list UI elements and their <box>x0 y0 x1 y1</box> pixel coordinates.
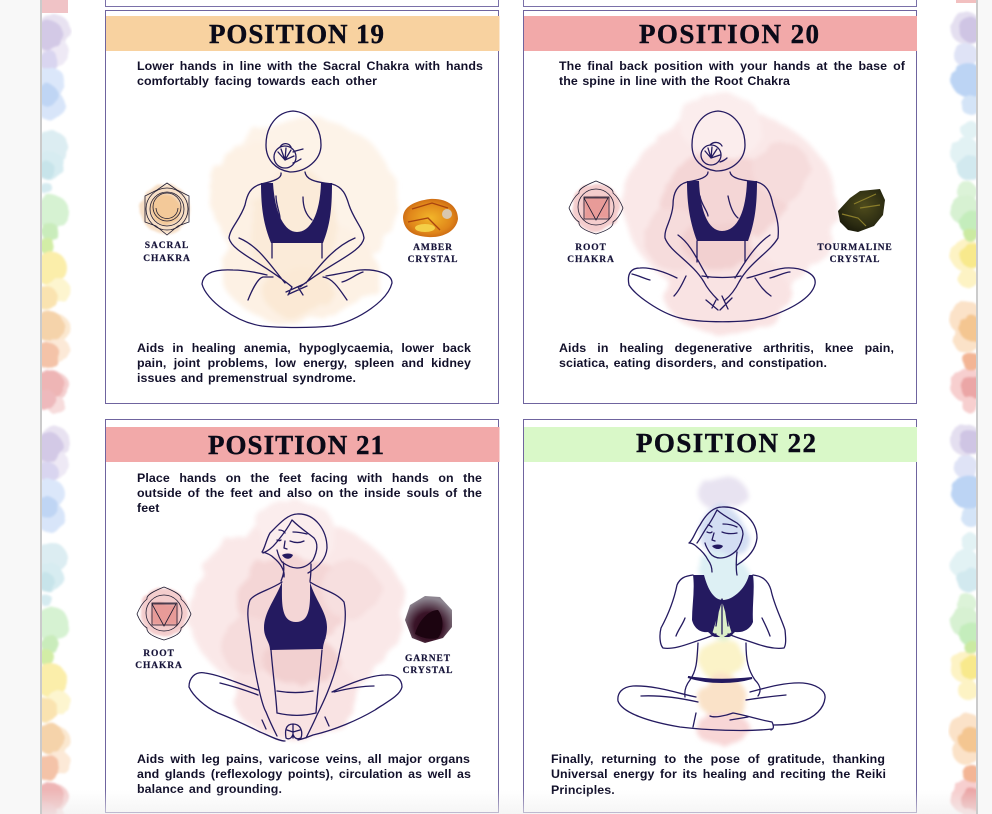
label: tourmaline crystal: TOURMALINE <box>817 243 893 253</box>
label: root chakra: ROOT <box>575 243 607 253</box>
heading band: position 22: POSITION 22 <box>636 428 816 458</box>
label: tourmaline crystal <box>817 243 893 265</box>
heading band: position 22 <box>524 427 917 462</box>
text: position 20 benefits <box>559 341 894 370</box>
text: position 20 instructions: The final back position with your hands at the base of <box>559 59 905 73</box>
label: root chakra: CHAKRA <box>567 255 615 265</box>
text: position 22 closing: Principles. <box>551 783 615 797</box>
text: position 19 instructions: comfortably facing towards each other <box>137 74 377 88</box>
watercolor aura <box>624 93 836 334</box>
previous panel bottom edge, left <box>105 0 499 7</box>
icon: garnet crystal <box>405 596 452 643</box>
text: position 21 benefits: and glands (reflexology points), circulation as well as <box>137 767 471 781</box>
left page margin <box>0 0 42 814</box>
heading band: position 21: POSITION 21 <box>208 430 384 460</box>
label: sacral chakra: SACRAL <box>145 241 189 251</box>
label: tourmaline crystal: CRYSTAL <box>830 255 880 265</box>
label: root chakra: CHAKRA <box>135 661 183 671</box>
panel: position 20 <box>523 10 917 404</box>
label: amber crystal: AMBER <box>413 243 453 253</box>
figure: seated front view, prayer pose <box>618 507 825 730</box>
figure: seated front view <box>189 514 402 741</box>
text: position 21 instructions: feet <box>137 501 159 515</box>
bottom page fade <box>42 790 976 814</box>
text: position 21 instructions: Place hands on the feet facing with hands on the <box>137 471 482 485</box>
text: position 20 benefits: Aids in healing degenerative arthritis, knee pain, <box>559 341 894 355</box>
label: amber crystal <box>408 243 458 265</box>
figure: seated back view <box>202 111 392 328</box>
previous panel bottom edge, right <box>523 0 917 7</box>
right page margin <box>976 0 992 814</box>
heading band: position 19: POSITION 19 <box>209 19 384 49</box>
heading band: position 19 <box>106 16 500 51</box>
panel: position 21 <box>105 419 499 813</box>
text: position 20 instructions: the spine in line with the Root Chakra <box>559 74 790 88</box>
label: garnet crystal <box>403 654 453 676</box>
text: position 21 instructions: outside of the feet and also on the inside souls of the <box>137 486 482 500</box>
label: sacral chakra: CHAKRA <box>143 254 191 264</box>
text: position 22 closing: Finally, returning to the pose of gratitude, thanking <box>551 752 885 766</box>
label: garnet crystal: CRYSTAL <box>403 666 453 676</box>
rainbow chakra aura <box>696 475 748 746</box>
panel: position 19 <box>105 10 499 404</box>
text: position 20 instructions <box>559 59 905 88</box>
text: position 21 benefits: Aids with leg pains, varicose veins, all major organs <box>137 752 470 766</box>
text: position 21 benefits: balance and grounding. <box>137 782 282 796</box>
text: position 19 benefits: issues and premenstrual syndrome. <box>137 371 356 385</box>
figure: seated back view <box>628 111 815 322</box>
text: position 19 benefits <box>137 341 471 385</box>
text: position 22 closing: Universal energy for its healing and reciting the Reiki <box>551 767 886 781</box>
heading band: position 21 <box>106 427 500 462</box>
heading band: position 20: POSITION 20 <box>639 19 819 49</box>
label: garnet crystal: GARNET <box>405 654 451 664</box>
label: sacral chakra <box>143 241 191 264</box>
right watercolor rainbow strip <box>948 0 976 814</box>
text: position 21 instructions <box>137 471 482 515</box>
icon: tourmaline crystal <box>838 189 885 232</box>
icon: root chakra <box>569 181 623 234</box>
icon: amber crystal <box>403 199 458 237</box>
text: position 19 instructions <box>137 59 483 88</box>
text: position 21 benefits <box>137 752 471 796</box>
label: root chakra <box>135 649 183 671</box>
text: position 20 benefits: sciatica, eating disorders, and constipation. <box>559 356 827 370</box>
icon: sacral chakra <box>140 183 190 235</box>
heading band: position 20 <box>524 16 917 51</box>
label: root chakra: ROOT <box>143 649 175 659</box>
watercolor aura <box>189 500 405 739</box>
left watercolor rainbow strip <box>42 0 72 814</box>
panel: position 22 <box>523 419 917 813</box>
watercolor aura <box>208 118 397 322</box>
text: position 22 closing <box>551 752 886 797</box>
text: position 19 instructions: Lower hands in line with the Sacral Chakra with hands <box>137 59 483 73</box>
label: amber crystal: CRYSTAL <box>408 255 458 265</box>
label: root chakra <box>567 243 615 265</box>
text: position 19 benefits: pain, joint problems, low energy, spleen and kidney <box>137 356 471 370</box>
icon: root chakra <box>137 587 191 640</box>
text: position 19 benefits: Aids in healing anemia, hypoglycaemia, lower back <box>137 341 471 355</box>
